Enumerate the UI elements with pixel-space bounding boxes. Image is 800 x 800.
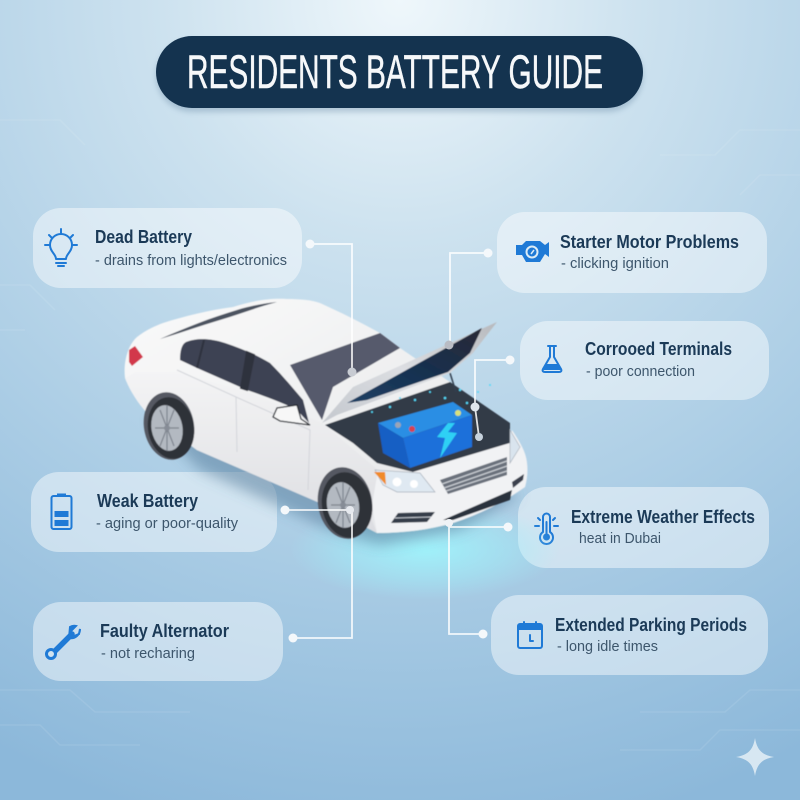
hood strut	[450, 373, 456, 392]
card: Corrooed Terminals	[520, 321, 769, 400]
heading: Dead Battery	[95, 227, 192, 247]
description: - drains from lights/electronics	[95, 252, 287, 269]
card: Weak Battery	[31, 472, 277, 552]
grille	[440, 457, 507, 494]
icon: wrench	[46, 626, 80, 658]
fog vent	[391, 512, 435, 523]
front wheel	[312, 463, 378, 543]
description: - poor connection	[586, 363, 695, 380]
connector: Weak Battery and Faulty Alternator	[280, 506, 354, 642]
engine bay	[325, 382, 510, 472]
heading: Corrooed Terminals	[585, 339, 732, 359]
window pillars	[197, 340, 254, 390]
door seams	[177, 370, 310, 490]
heading: Weak Battery	[97, 491, 198, 511]
card: Extreme Weather Effects	[518, 487, 769, 568]
taillight	[129, 346, 143, 366]
title banner	[156, 36, 643, 112]
roof strip	[160, 302, 277, 339]
headlight lamps	[392, 478, 418, 488]
heading: Extended Parking Periods	[555, 615, 747, 635]
heading: Extreme Weather Effects	[571, 507, 755, 527]
lower vent	[443, 490, 512, 520]
car side panel	[125, 372, 378, 533]
icon: battery	[52, 494, 72, 529]
car body	[125, 299, 527, 533]
icon: motor	[516, 241, 549, 262]
connector: Corrooed Terminals	[470, 356, 514, 441]
icon: light bulb	[45, 229, 77, 266]
card: Dead Battery	[33, 208, 302, 288]
description: heat in Dubai	[579, 530, 661, 547]
rear wheel	[138, 388, 200, 464]
car	[125, 299, 527, 545]
connector: Starter Motor Problems	[444, 248, 492, 350]
lightning bolt	[437, 423, 457, 458]
description: - aging or poor-quality	[96, 515, 238, 532]
circuit pattern	[0, 120, 800, 750]
side vent	[512, 474, 524, 488]
side mirror	[273, 405, 310, 425]
car shadow	[150, 420, 520, 545]
battery	[378, 402, 472, 468]
icon: flask	[543, 346, 561, 372]
icon: thermometer	[535, 514, 558, 544]
icon: calendar	[518, 622, 542, 648]
headlight left	[375, 470, 435, 492]
indicator	[374, 472, 386, 485]
connector: Dead Battery	[306, 240, 356, 376]
description: - long idle times	[557, 638, 658, 655]
heading: Starter Motor Problems	[560, 232, 739, 252]
card: Extended Parking Periods	[491, 595, 768, 675]
side windows	[180, 339, 309, 423]
card: Starter Motor Problems	[497, 212, 767, 293]
connector: Extreme Weather and Extended Parking	[445, 519, 512, 638]
glow under car	[290, 500, 560, 600]
open hood	[322, 322, 497, 423]
description: - not recharing	[101, 645, 195, 662]
headlight right	[510, 430, 520, 463]
sparks	[371, 369, 491, 413]
sparkle star	[736, 738, 774, 776]
windshield	[290, 333, 400, 420]
hood underside	[347, 328, 482, 403]
card: Faulty Alternator	[33, 602, 283, 681]
description: - clicking ignition	[561, 255, 669, 272]
front bumper	[372, 430, 527, 533]
heading: Faulty Alternator	[100, 621, 229, 641]
